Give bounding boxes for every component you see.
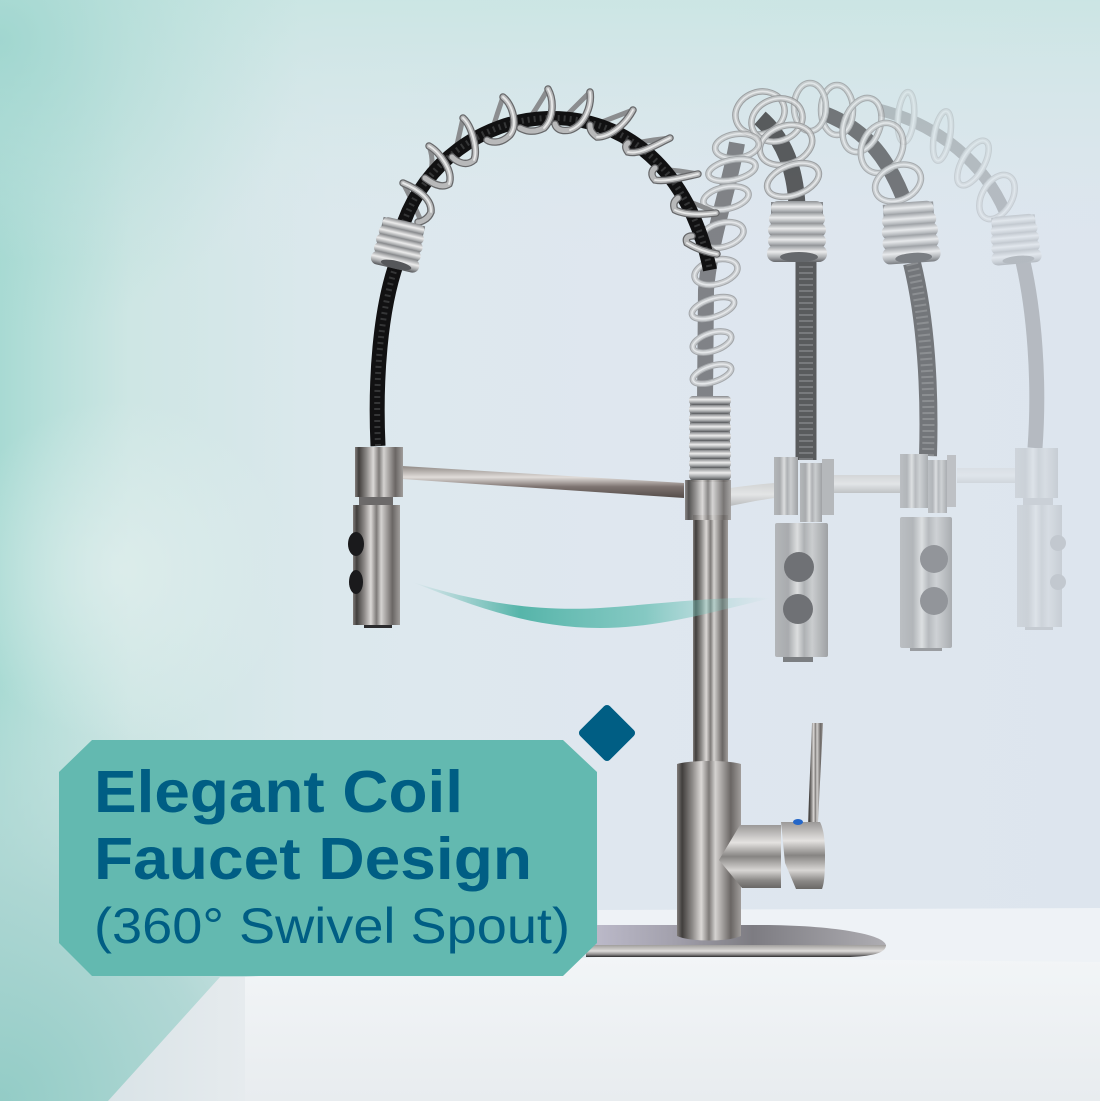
ghost faucet middle [794,83,956,651]
ghost spring and hose on the column [689,131,760,400]
panel shape [59,740,597,976]
upper pipe [693,515,728,765]
diamond accent [577,703,637,763]
swivel joint [685,480,731,520]
steel coil collar on hose [370,215,429,274]
teal motion swoosh [412,582,772,628]
main column and base [586,480,886,957]
coil spring collar on column [689,396,731,482]
title line 2: Faucet Design [94,826,532,892]
ghost faucet near [729,85,834,662]
spray head [348,447,403,628]
ghost faucet far right [880,91,1066,630]
title line 1: Elegant Coil [94,759,463,825]
spray head collar [355,447,403,497]
base cylinder [677,761,741,940]
spray head body [353,505,400,625]
callout panel [59,740,597,976]
mounting plate [586,925,886,957]
horizontal support bar [402,466,684,498]
spray buttons [348,532,364,594]
main black braided hose [377,118,710,446]
coil back strands behind hose [403,89,717,254]
handle body [719,723,825,889]
white sink [108,908,1100,1101]
steel coil around hose [403,89,717,254]
subtitle: (360° Swivel Spout) [94,898,570,954]
